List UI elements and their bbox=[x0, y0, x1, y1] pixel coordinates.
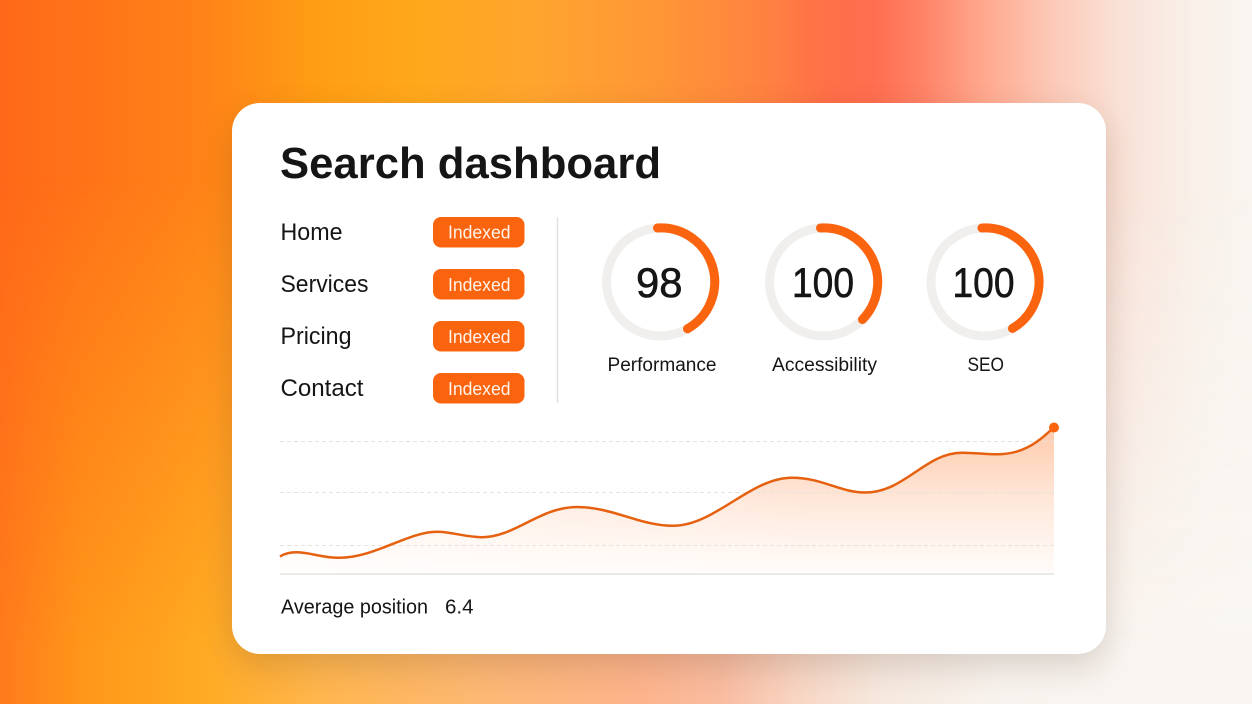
panel: dashboard card bbox=[232, 103, 1106, 654]
gauge: Performance 98: Performance bbox=[608, 355, 716, 376]
gauge: SEO 100 bbox=[931, 228, 1039, 376]
row: Pricing: Pricing bbox=[280, 323, 352, 350]
gauge: Performance 98: 98 bbox=[636, 259, 682, 306]
gauge: SEO 100: SEO bbox=[968, 355, 1004, 376]
row: Contact bbox=[280, 373, 524, 404]
row: Pricing bbox=[280, 321, 524, 352]
row: Services bbox=[280, 269, 524, 300]
title: Search dashboard bbox=[280, 139, 661, 188]
gauge: Accessibility 100 bbox=[770, 228, 878, 376]
row: Services: Indexed bbox=[448, 275, 510, 295]
area line chart bbox=[280, 422, 1059, 574]
row: Home: Home bbox=[280, 219, 342, 246]
average position metric: 6.4 bbox=[445, 596, 474, 618]
row: Services: Services bbox=[280, 271, 368, 298]
page status list bbox=[280, 217, 524, 404]
row: Home: Indexed bbox=[448, 222, 510, 242]
gauge: SEO 100: 100 bbox=[952, 259, 1014, 306]
row: Home bbox=[280, 217, 524, 248]
gauge: Performance 98 bbox=[606, 228, 716, 376]
row: Contact: Contact bbox=[280, 375, 364, 402]
row: Contact: Indexed bbox=[448, 379, 510, 399]
background lower fade bbox=[0, 275, 1201, 704]
row: Pricing: Indexed bbox=[448, 327, 510, 347]
gauge: Accessibility 100: Accessibility bbox=[772, 355, 877, 376]
average position metric: Average position bbox=[281, 596, 428, 618]
gauge: Accessibility 100: 100 bbox=[792, 259, 854, 306]
